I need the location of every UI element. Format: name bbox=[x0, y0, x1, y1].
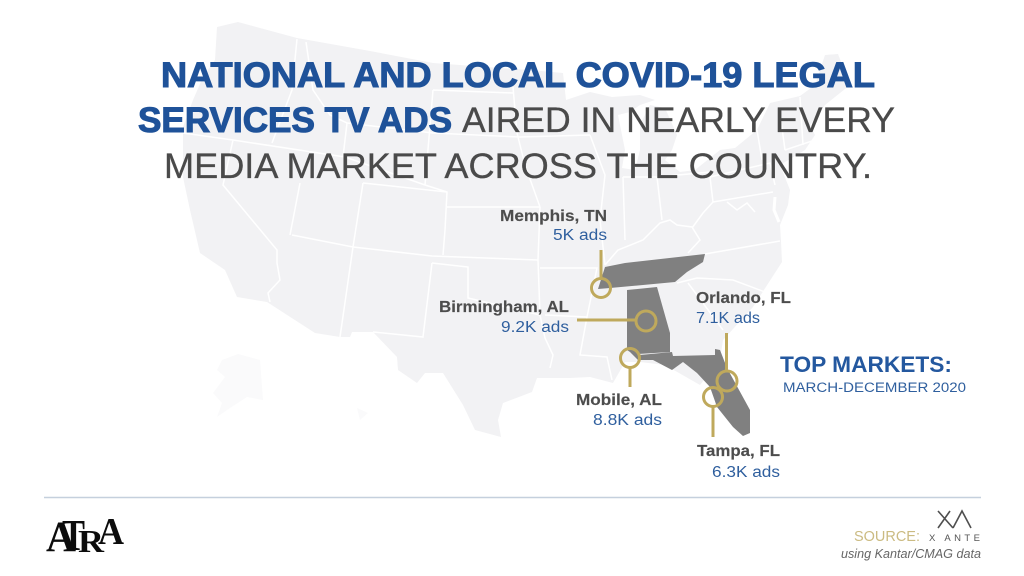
logo: ATRA bbox=[46, 511, 125, 561]
label: Tampa bbox=[697, 443, 780, 481]
label: Birmingham: Birmingham, AL bbox=[439, 299, 569, 316]
marker: Orlando bbox=[717, 333, 737, 391]
top markets heading: TOP MARKETS: bbox=[780, 352, 952, 377]
source credit: using Kantar/CMAG data bbox=[841, 547, 981, 561]
logo: ATRA: T bbox=[62, 511, 85, 560]
title: SERVICES TV ADS bbox=[138, 101, 452, 140]
label: Memphis: Memphis, TN bbox=[500, 208, 607, 225]
source credit: SOURCE: bbox=[854, 529, 920, 545]
title: MEDIA MARKET ACROSS THE COUNTRY. bbox=[164, 147, 872, 186]
logo: ATRA: R bbox=[78, 523, 105, 559]
label: Mobile: 8.8K ads bbox=[593, 412, 662, 429]
logo: ATRA: A bbox=[98, 511, 125, 553]
source credit bbox=[841, 529, 981, 561]
logo: ATRA: A bbox=[46, 514, 76, 561]
logo: X Ante bbox=[929, 511, 980, 544]
top markets heading bbox=[780, 352, 966, 395]
top markets heading: MARCH-DECEMBER 2020 bbox=[783, 380, 966, 395]
label: Mobile bbox=[576, 392, 662, 429]
map: United States background bbox=[183, 22, 850, 437]
label: Orlando: Orlando, FL bbox=[696, 290, 791, 307]
label: Memphis: 5K ads bbox=[553, 227, 607, 244]
label: Birmingham bbox=[439, 299, 569, 336]
logo: X Ante: X ANTE bbox=[929, 533, 980, 544]
label: Tampa: Tampa, FL bbox=[697, 443, 780, 460]
label: Orlando bbox=[696, 290, 791, 327]
label: Memphis bbox=[500, 208, 607, 244]
marker: Mobile bbox=[620, 348, 640, 387]
label: Birmingham: 9.2K ads bbox=[501, 319, 569, 336]
marker: Birmingham bbox=[577, 311, 656, 331]
title bbox=[138, 56, 895, 186]
title: NATIONAL AND LOCAL COVID-19 LEGAL bbox=[161, 56, 875, 95]
highlighted states: Tennessee, Alabama, Florida bbox=[598, 254, 750, 436]
title: AIRED IN NEARLY EVERY bbox=[462, 101, 895, 140]
label: Tampa: 6.3K ads bbox=[712, 464, 780, 481]
label: Orlando: 7.1K ads bbox=[696, 310, 760, 327]
marker: Tampa bbox=[704, 388, 722, 437]
marker: Memphis bbox=[592, 250, 610, 298]
label: Mobile: Mobile, AL bbox=[576, 392, 662, 409]
